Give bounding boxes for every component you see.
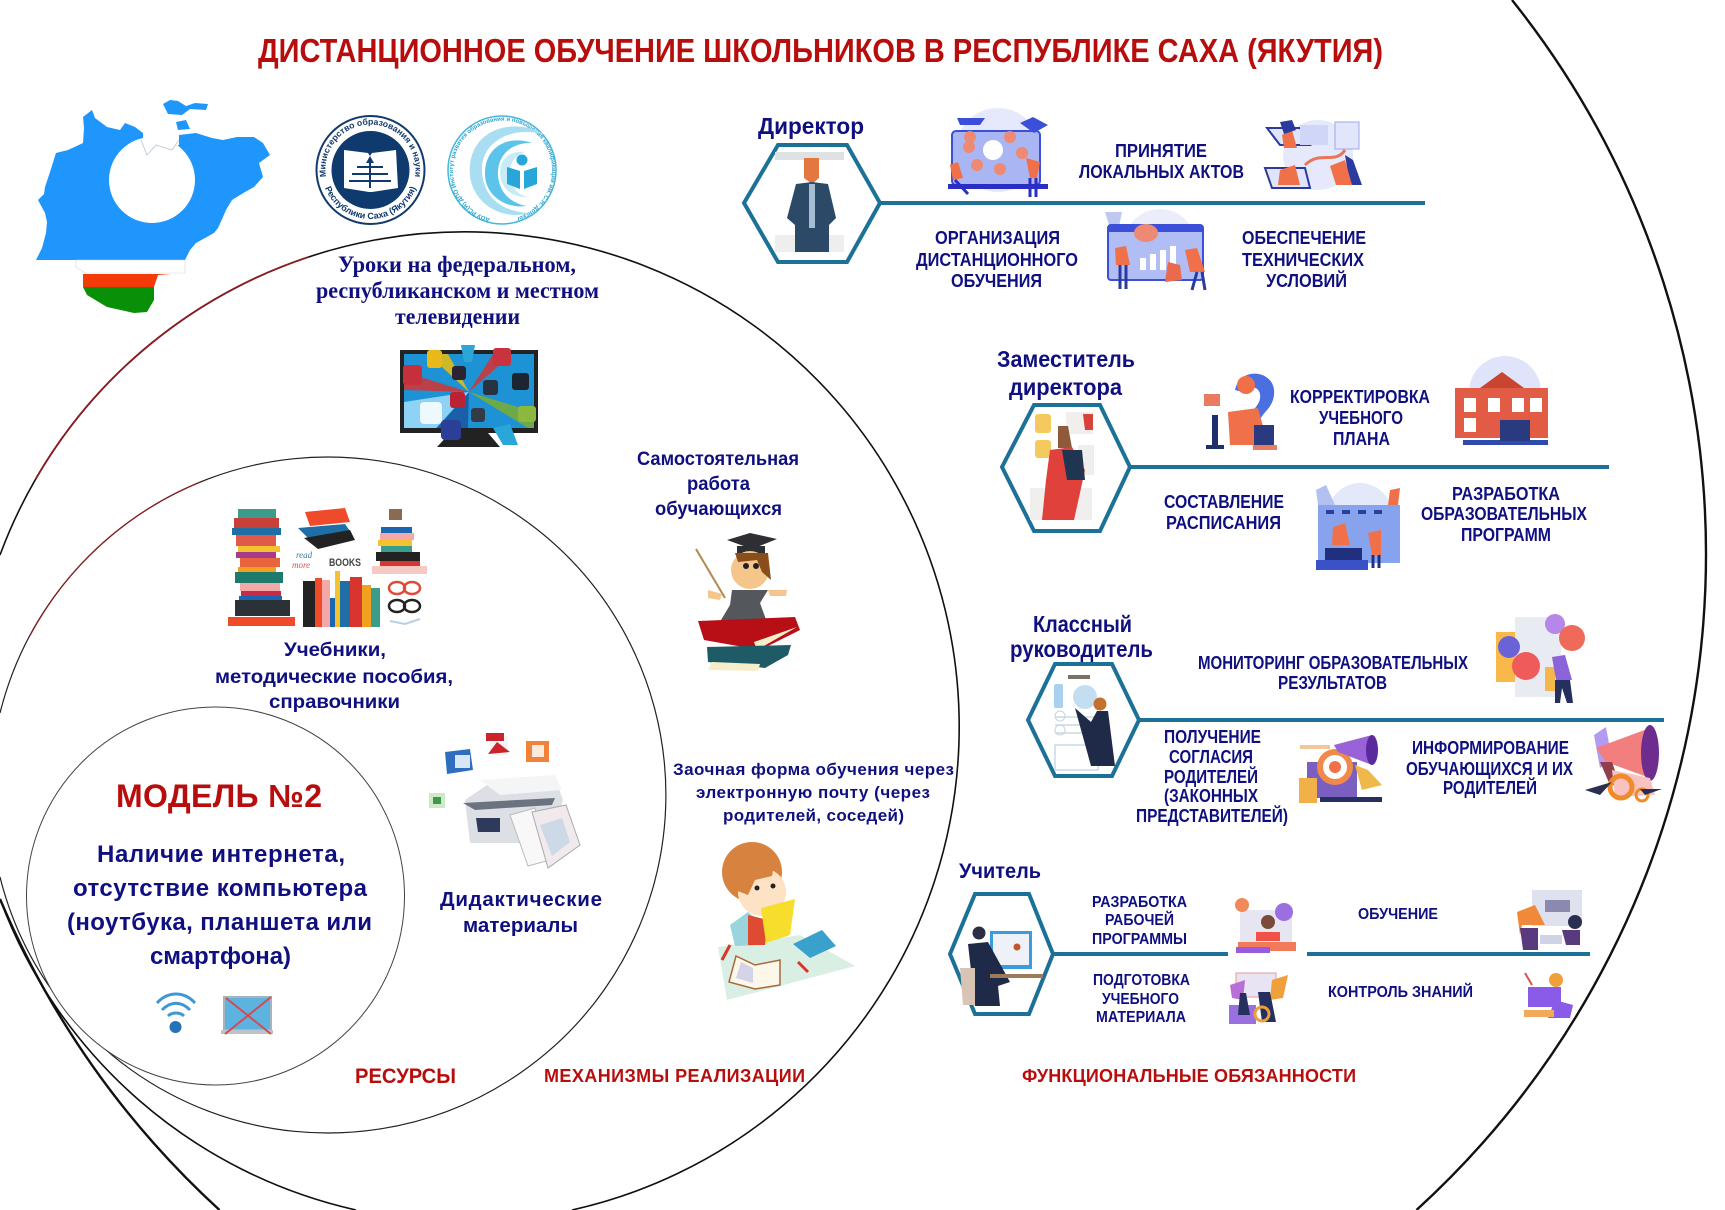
label: functional duties: ФУНКЦИОНАЛЬНЫЕ ОБЯЗАННОСТИ [1022, 1066, 1356, 1086]
text: independent work: обучающихся [655, 499, 782, 520]
icon: online meeting [1265, 120, 1362, 190]
text: teaching material: УЧЕБНОГО [1102, 991, 1179, 1008]
deputy hexagon portrait [1002, 405, 1130, 531]
text: monitoring of results: МОНИТОРИНГ ОБРАЗОВАТЕЛЬНЫХ [1198, 653, 1468, 673]
text: schedule: РАСПИСАНИЯ [1166, 513, 1281, 533]
icon: team with charts [1229, 973, 1288, 1024]
text: educational programmes: ПРОГРАММ [1461, 525, 1551, 545]
text: adoption of local acts: ПРИНЯТИЕ [1115, 141, 1207, 161]
text: knowledge control: КОНТРОЛЬ ЗНАНИЙ [1328, 982, 1473, 1001]
icon: boy reading [718, 842, 855, 1000]
director heading: Директор [758, 113, 864, 139]
deputy heading [997, 346, 1135, 400]
text: work programme: ПРОГРАММЫ [1092, 931, 1187, 948]
model description: отсутствие компьютера [73, 875, 368, 902]
text: parental consent: РОДИТЕЛЕЙ [1164, 766, 1258, 787]
text: informing students and parents: РОДИТЕЛЕЙ [1443, 777, 1537, 798]
director timeline line [880, 201, 1425, 205]
deputy heading: Заместитель [997, 346, 1135, 372]
icon: world map lesson [1517, 890, 1582, 950]
title: ДИСТАНЦИОННОЕ ОБУЧЕНИЕ ШКОЛЬНИКОВ В РЕСПУБЛИКЕ САХА (ЯКУТИЯ) [258, 32, 1383, 69]
text: parental consent: ПРЕДСТАВИТЕЛЕЙ) [1136, 805, 1288, 826]
panel: deputy director [997, 346, 1609, 570]
text: parental consent [1136, 727, 1288, 826]
icon: large megaphone [1585, 725, 1662, 801]
icon: stack of books: read [296, 550, 313, 560]
class teacher heading: руководитель [1010, 636, 1153, 662]
text: educational programmes: РАЗРАБОТКА [1452, 484, 1560, 504]
text: textbooks [215, 640, 453, 713]
model description [67, 841, 372, 970]
teacher heading: Учитель [959, 860, 1041, 883]
text: parental consent: (ЗАКОННЫХ [1164, 786, 1258, 806]
text: work programme: РАБОЧЕЙ [1105, 910, 1174, 929]
text: technical conditions: УСЛОВИЙ [1266, 270, 1347, 291]
class teacher heading [1010, 611, 1153, 662]
text: didactic materials: Дидактические [440, 888, 602, 911]
logo: ministry of education [316, 115, 426, 225]
icon: stack of books: BOOKS [329, 557, 361, 569]
text: correspondence form [673, 760, 954, 825]
model description: смартфона) [150, 943, 291, 970]
text: technical conditions: ТЕХНИЧЕСКИХ [1242, 250, 1364, 270]
model description: Наличие интернета, [97, 841, 345, 868]
teacher hexagon portrait [950, 894, 1053, 1014]
icon: wifi [157, 994, 195, 1033]
text: correspondence form: Заочная форма обучения через [673, 760, 954, 779]
text: textbooks: Учебники, [284, 640, 386, 661]
text: parental consent: ПОЛУЧЕНИЕ [1164, 727, 1261, 747]
text: correspondence form: родителей, соседей) [723, 806, 904, 825]
logo: institute of education development [447, 115, 557, 225]
icon: laptop with team [948, 108, 1048, 197]
text: teaching material: МАТЕРИАЛА [1096, 1009, 1186, 1026]
icon: phone with chat bubbles [1496, 614, 1585, 703]
icon: target and megaphone [1299, 735, 1382, 803]
text: work programme [1092, 894, 1187, 948]
text: educational programmes [1421, 484, 1587, 545]
text: monitoring of results [1198, 653, 1468, 693]
text: curriculum correction: КОРРЕКТИРОВКА [1290, 387, 1430, 407]
text: curriculum correction: ПЛАНА [1333, 429, 1390, 449]
text: work programme: РАЗРАБОТКА [1092, 894, 1187, 911]
icon: printer and document files [429, 733, 580, 868]
model heading: МОДЕЛЬ №2 [116, 778, 322, 814]
text: independent work: работа [687, 474, 750, 495]
icon: question mark thinker [1204, 374, 1277, 450]
circle: resources [0, 457, 666, 1133]
text: independent work: Самостоятельная [637, 449, 799, 470]
icon: TV with apps [400, 345, 538, 447]
text: organisation of distance learning: ОБУЧЕНИЯ [951, 271, 1042, 291]
text: teaching: ОБУЧЕНИЕ [1358, 906, 1438, 923]
text: teaching material [1093, 972, 1190, 1026]
director hexagon portrait [744, 145, 880, 262]
text: monitoring of results: РЕЗУЛЬТАТОВ [1278, 673, 1387, 693]
text: organisation of distance learning [916, 228, 1078, 291]
class teacher hexagon portrait [1028, 664, 1139, 776]
text: lessons on TV: телевидении [395, 304, 520, 329]
text: lessons on TV: республиканском и местном [316, 278, 599, 303]
icon: presentation chart [1105, 209, 1205, 290]
icon: schedule board [1316, 483, 1400, 570]
icon: video lesson [1235, 898, 1296, 953]
text: lessons on TV: Уроки на федеральном, [338, 252, 576, 277]
label: resources: РЕСУРСЫ [355, 1065, 456, 1088]
text: independent work [637, 449, 799, 520]
text: schedule [1164, 492, 1284, 533]
map of Yakutia with flag [36, 100, 270, 313]
panel: class teacher [1010, 611, 1664, 826]
teacher timeline line [1053, 952, 1590, 956]
panel: teacher [950, 860, 1590, 1026]
text: educational programmes: ОБРАЗОВАТЕЛЬНЫХ [1421, 504, 1587, 524]
icon: crossed-out laptop [221, 997, 273, 1034]
text: technical conditions: ОБЕСПЕЧЕНИЕ [1242, 228, 1366, 248]
text: didactic materials: материалы [463, 914, 578, 937]
circle: model [26, 707, 404, 1085]
panel: director [744, 108, 1425, 291]
icon: stack of books: more [292, 560, 310, 570]
logo: institute of education development: АОУ РС(Я) ДПО Институт развития образования и повышения квалификации им. С.Н. Донского [450, 118, 556, 222]
text: informing students and parents: ОБУЧАЮЩИХСЯ И ИХ [1406, 759, 1573, 779]
class teacher heading: Классный [1033, 611, 1132, 637]
icon: stack of books [228, 508, 427, 627]
text: informing students and parents [1406, 738, 1573, 798]
text: curriculum correction [1290, 387, 1430, 449]
text: schedule: СОСТАВЛЕНИЕ [1164, 492, 1284, 512]
text: organisation of distance learning: ОРГАНИЗАЦИЯ [935, 228, 1060, 248]
text: curriculum correction: УЧЕБНОГО [1319, 408, 1403, 428]
text: correspondence form: электронную почту (через [696, 783, 930, 802]
logo: ministry of education: Республики Саха (Якутия) [325, 186, 417, 220]
deputy heading: директора [1009, 374, 1122, 400]
text: organisation of distance learning: ДИСТАНЦИОННОГО [916, 250, 1078, 270]
text: lessons on TV [316, 252, 599, 329]
circle: implementation mechanisms [0, 232, 959, 1210]
text: teaching material: ПОДГОТОВКА [1093, 972, 1190, 989]
class teacher timeline line [1139, 718, 1664, 722]
text: informing students and parents: ИНФОРМИРОВАНИЕ [1412, 738, 1569, 758]
icon: school building [1455, 356, 1548, 445]
text: textbooks: справочники [269, 692, 400, 713]
model description: (ноутбука, планшета или [67, 909, 372, 936]
icon: student sitting on books [696, 533, 800, 671]
icon: knowledge test [1524, 973, 1573, 1018]
text: textbooks: методические пособия, [215, 667, 453, 688]
text: technical conditions [1242, 228, 1366, 291]
text: parental consent: СОГЛАСИЯ [1169, 747, 1253, 767]
label: implementation mechanisms: МЕХАНИЗМЫ РЕАЛИЗАЦИИ [544, 1066, 805, 1086]
text: didactic materials [440, 888, 602, 937]
text: adoption of local acts [1079, 141, 1244, 182]
text: adoption of local acts: ЛОКАЛЬНЫХ АКТОВ [1079, 162, 1244, 182]
deputy timeline line [1130, 465, 1609, 469]
logo: ministry of education: Министерство образования и науки [320, 118, 420, 177]
